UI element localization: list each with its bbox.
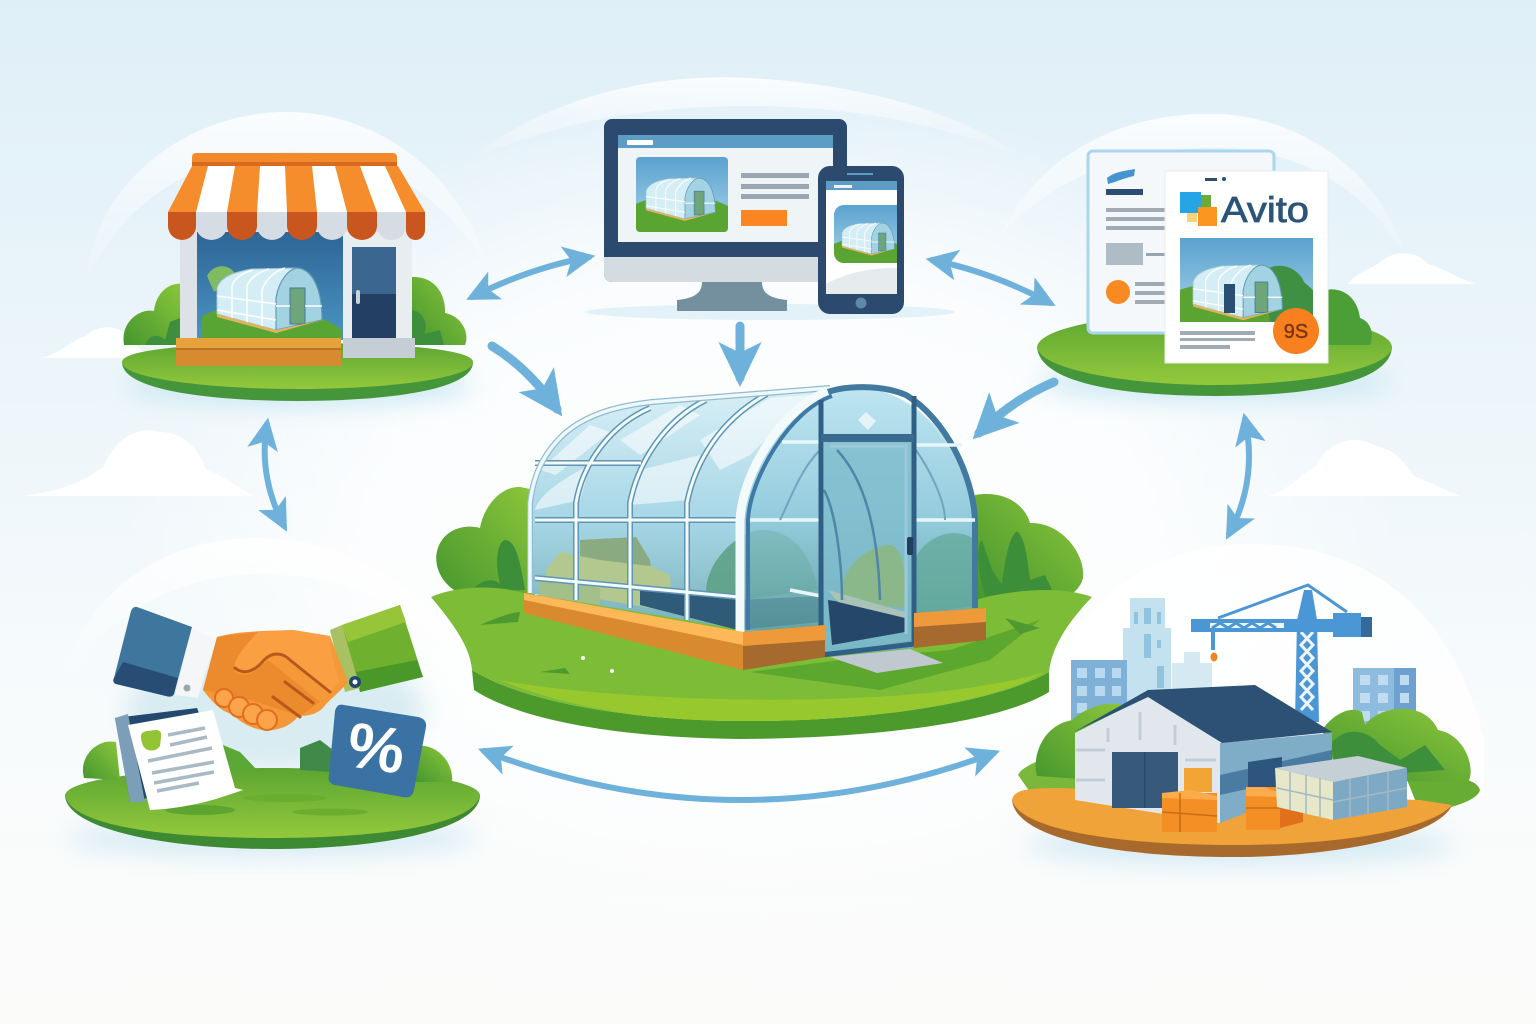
awning: [168, 153, 425, 240]
arrow: deal to manufacturer: [484, 751, 994, 800]
arrow: classifieds to centre: [979, 382, 1054, 433]
panel: manufacturer: [1012, 544, 1484, 865]
halo dome: website: [470, 77, 1020, 160]
discount badge: 9S: [1284, 321, 1308, 343]
hands: [203, 630, 348, 730]
island: manufacturer: [1012, 788, 1452, 857]
interior greenery: [706, 530, 818, 600]
discount badge: [1273, 308, 1319, 354]
arrow: shop to centre: [492, 346, 557, 409]
desktop monitor: [604, 119, 847, 311]
central island: [431, 587, 1092, 739]
material stack: [1275, 756, 1407, 820]
interior pile: [540, 537, 672, 612]
front arch: [740, 392, 828, 632]
arrow: shop to deal: [265, 424, 284, 526]
clouds: [22, 253, 1476, 496]
arrows: [265, 257, 1249, 800]
flyer photo: [1180, 238, 1313, 322]
monitor product photo: [636, 157, 728, 232]
interior floor: [640, 590, 820, 630]
cuff: green sleeve: [342, 605, 423, 692]
central greenhouse: [431, 387, 1092, 739]
bushes: shop: [123, 277, 466, 345]
ribs: shadow: [535, 394, 767, 620]
island shadow: shop: [123, 363, 473, 407]
warehouse: [1074, 685, 1332, 823]
outer left edge: [530, 388, 830, 593]
bushes: deal: [83, 740, 452, 782]
central bushes: [436, 487, 1083, 600]
arrow: shop to website: [472, 257, 589, 297]
contract: [115, 708, 243, 810]
halo dome: deal: [64, 538, 470, 690]
panel: partner deal: [64, 538, 480, 856]
greenhouse body: [528, 387, 975, 657]
roof highlights: [535, 395, 810, 510]
arrow: website to classifieds: [932, 260, 1050, 303]
bushes: manufacturer: [1036, 704, 1471, 782]
cuff: dark sleeve: [113, 607, 192, 697]
percent card: %: [343, 708, 409, 788]
panel: website: [470, 77, 1020, 320]
island: deal: [65, 768, 480, 849]
door: [821, 396, 914, 655]
phone: [818, 166, 904, 314]
soft tint behind hands: [125, 650, 425, 770]
green ground: manufacturer: [1018, 750, 1480, 812]
front face: [743, 388, 975, 640]
timber base: [524, 593, 986, 670]
halo dome: manufacturer: [1050, 544, 1484, 800]
avito logo: Avito: [1221, 189, 1309, 230]
island shadow: classifieds: [1037, 362, 1393, 402]
crane: [1191, 585, 1372, 722]
skyline: [1071, 598, 1416, 733]
arrow: website to centre: [736, 326, 744, 378]
door step: [830, 649, 943, 673]
bush: classifieds: [1325, 289, 1372, 345]
front bars: [750, 442, 975, 596]
front flyer: [1165, 171, 1328, 363]
panel: shop: [84, 112, 488, 407]
avito logo: [1180, 189, 1309, 230]
percent card: [329, 705, 426, 797]
ribs: white: [535, 394, 767, 620]
orange boxes: [1162, 768, 1303, 832]
handshake: [113, 605, 423, 730]
shop building: [176, 225, 415, 366]
panel: classifieds: [1000, 114, 1408, 402]
island shadow: deal: [67, 820, 477, 856]
halo dome: classifieds: [1000, 114, 1408, 262]
shop window greenhouse: [217, 268, 322, 333]
island: shop: [122, 343, 473, 401]
arrow: classifieds to manufacturer: [1229, 419, 1249, 534]
island shadow: manufacturer: [1025, 825, 1455, 865]
halo dome: shop: [84, 112, 488, 290]
back flyer: [1088, 151, 1274, 333]
island: classifieds: [1037, 313, 1392, 396]
desktop shadow: [585, 304, 955, 320]
